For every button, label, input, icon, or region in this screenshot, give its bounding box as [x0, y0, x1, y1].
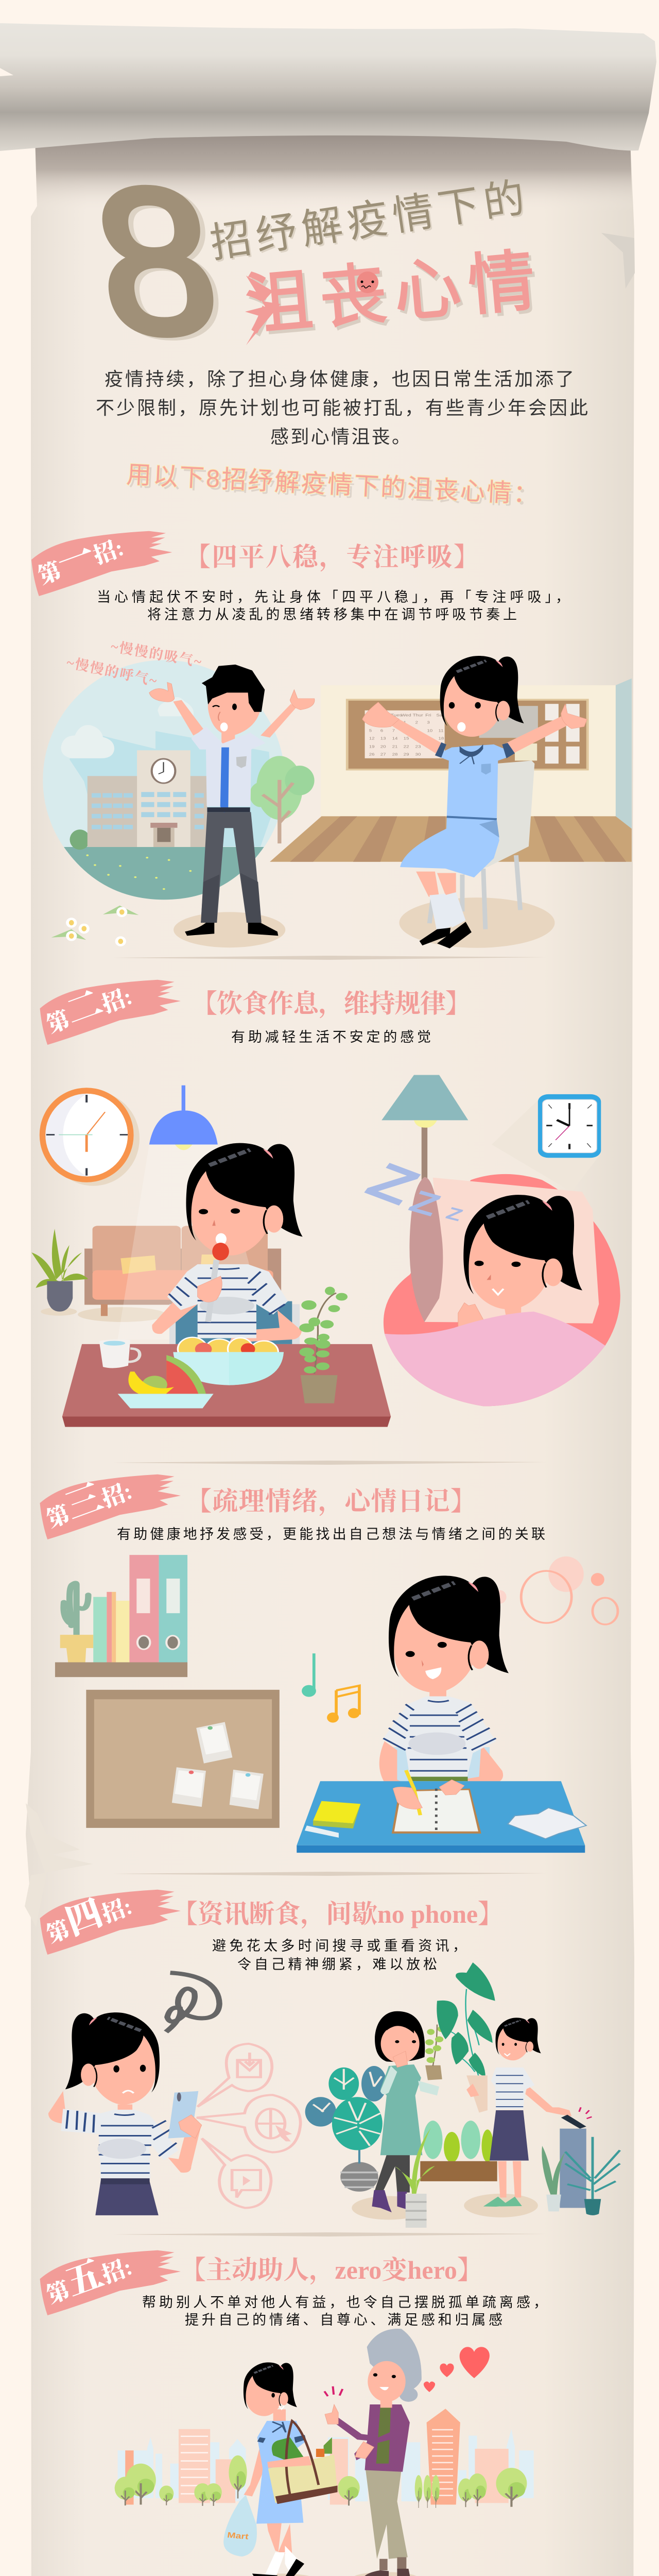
potted plant	[31, 1229, 88, 1316]
girl holding plant	[464, 2018, 571, 2217]
section 4 banner	[40, 1883, 181, 1955]
section 1 heading: 【四平八稳，专注呼吸】	[185, 543, 479, 572]
yellow books	[305, 1801, 366, 1838]
section 2 banner: 第二招:	[40, 973, 136, 1041]
sofa	[78, 1226, 281, 1322]
intro text block: 疫情持续，除了担心身体健康，也因日常生活加添了	[105, 368, 574, 389]
section 1 banner: 第一招:	[31, 524, 128, 592]
tall green plant	[437, 1962, 495, 2113]
section 4 heading: 【资讯断食，间歇no phone】	[172, 1900, 504, 1929]
title line two: 沮丧心情	[241, 226, 539, 348]
pendant lamp	[118, 1086, 269, 1340]
shopping girl	[223, 2362, 337, 2576]
classroom: Tues	[391, 713, 402, 717]
classroom: 15	[404, 736, 409, 740]
intro text block: 不少限制，原先计划也可能被打乱，有些青少年会因此	[96, 397, 588, 418]
section 4 banner: 第四招:	[40, 1883, 136, 1951]
classroom: 3	[427, 720, 430, 724]
section 2 text: 有助减轻生活不安定的感觉	[231, 1029, 431, 1045]
chair	[429, 760, 534, 929]
section 4 text: 令自己精神绷紧，难以放松	[237, 1957, 437, 1972]
shadows	[174, 897, 555, 948]
top scroll roll	[0, 23, 656, 151]
classroom: 28	[392, 752, 398, 756]
shopping girl: Mart	[227, 2530, 249, 2541]
section 1 text: 当心情起伏不安时，先让身体「四平八稳」，再「专注呼吸」，	[97, 589, 569, 605]
girl writing diary	[379, 1575, 509, 1794]
title numeral 8: 8	[83, 146, 230, 377]
phone on column with plants	[542, 2107, 620, 2215]
classroom: 14	[392, 736, 398, 740]
classroom: 23	[415, 744, 421, 749]
section 2 illustration	[31, 1075, 620, 1427]
section 4 illustration	[48, 1962, 620, 2228]
classroom: 27	[380, 752, 386, 756]
dining table	[62, 1344, 391, 1427]
sleep z letters	[355, 1152, 466, 1225]
section 1 text	[97, 589, 569, 622]
icon: sad face	[357, 272, 378, 293]
torn paper fold right top	[601, 233, 635, 289]
classroom: 5	[369, 728, 372, 733]
water cup	[99, 1340, 140, 1368]
fruit tray	[118, 1355, 214, 1408]
section 5 heading: 【主动助人，zero变hero】	[180, 2256, 483, 2285]
open book	[508, 1808, 586, 1839]
classroom: 11	[438, 728, 444, 733]
classroom: 29	[404, 752, 409, 756]
section 3 banner: 第三招:	[40, 1468, 136, 1535]
section 5 text: 帮助别人不单对他人有益，也令自己摆脱孤单疏离感，	[142, 2295, 547, 2310]
intro text block: 感到心情沮丧。	[270, 426, 410, 447]
blue alarm clock	[492, 1094, 601, 1192]
flowers	[51, 906, 138, 946]
section 1 illustration	[43, 656, 632, 948]
classroom: Wed	[401, 713, 411, 717]
sleeping girl in bed	[384, 1174, 620, 1406]
sub heading: 用以下8招纾解疫情下的沮丧心情：	[126, 461, 539, 509]
section 2 banner	[40, 973, 181, 1045]
classroom: 30	[415, 752, 421, 756]
classroom: 22	[404, 744, 409, 749]
plant shop mother	[305, 2011, 445, 2219]
fern planter	[420, 2121, 497, 2181]
noodle bowl	[173, 1337, 284, 1385]
title line two shadow: 沮丧心情	[244, 229, 541, 351]
girl in uniform	[362, 656, 587, 948]
section dividers	[113, 956, 546, 2576]
sub heading shadow: 用以下8招纾解疫情下的沮丧心情：	[128, 464, 541, 511]
title line one shadow: 招纾解疫情下的	[207, 166, 530, 272]
sleep z letters: Z	[403, 1183, 447, 1223]
sleep z letters: Z	[355, 1152, 431, 1216]
wall shelf with binders	[55, 1555, 187, 1677]
notebook	[392, 1770, 481, 1834]
section 1 banner	[31, 524, 172, 596]
section 4 text: 避免花太多时间搜寻或重看资讯，	[212, 1938, 466, 1954]
classroom: 20	[380, 744, 386, 749]
tall foliage pot	[395, 2128, 435, 2228]
classroom: Sat	[436, 713, 444, 717]
classroom	[270, 679, 632, 862]
intro text block	[96, 368, 588, 447]
section 5 text: 提升自己的情绪、自尊心、满足感和归属感	[185, 2312, 502, 2328]
classroom: 18	[438, 736, 444, 740]
hearts	[424, 2347, 490, 2392]
tree	[250, 756, 315, 843]
school scene circle	[43, 660, 285, 900]
section 3 illustration	[55, 1555, 618, 1853]
classroom: 10	[427, 728, 433, 733]
city skyline	[115, 2409, 534, 2508]
girl eating	[152, 1143, 303, 1343]
decorative bubbles	[493, 1556, 618, 1624]
section 5 text	[142, 2295, 547, 2328]
classroom: Thur	[413, 713, 423, 717]
section 3 heading: 【疏理情绪，心情日记】	[186, 1487, 476, 1516]
cork board	[86, 1690, 280, 1828]
worried spiral	[166, 1973, 219, 2032]
classroom: 13	[380, 736, 386, 740]
section 3 text: 有助健康地抒发感受，更能找出自己想法与情绪之间的关联	[117, 1527, 545, 1542]
wall clock	[40, 1088, 140, 1186]
elderly woman	[324, 2329, 422, 2576]
classroom: 6	[380, 728, 384, 733]
title	[83, 146, 541, 379]
section 1 text: 将注意力从凌乱的思绪转移集中在调节呼吸节奏上	[147, 607, 517, 622]
floor lamp	[381, 1075, 468, 1180]
classroom: 2	[415, 720, 418, 724]
blue desk	[297, 1781, 585, 1853]
breath text two: ~慢慢的呼气~	[65, 655, 158, 689]
chair behind girl	[169, 1301, 300, 1344]
sleep z letters: Z	[443, 1204, 466, 1225]
section 3 banner	[40, 1468, 181, 1539]
music notes	[302, 1653, 360, 1723]
classroom: 1	[404, 720, 406, 724]
section 5 banner: 第五招:	[40, 2244, 136, 2311]
classroom: 7	[392, 728, 395, 733]
section 5 illustration	[115, 2329, 534, 2576]
boy in uniform	[149, 665, 315, 936]
classroom: Fri	[425, 713, 431, 717]
classroom: 19	[369, 744, 375, 749]
icon: lightning cracks	[245, 276, 281, 345]
classroom: 12	[369, 736, 375, 740]
classroom: 26	[369, 752, 375, 756]
title line one: 招纾解疫情下的	[206, 164, 528, 270]
title numeral 8 shadow: 8	[88, 149, 235, 379]
torn paper edge left	[25, 1803, 93, 1927]
worried girl with phone	[48, 2012, 202, 2215]
section 5 banner	[40, 2244, 181, 2315]
shadow under the top roll	[35, 135, 632, 211]
section 4 text	[212, 1938, 466, 1972]
classroom: 21	[392, 744, 398, 749]
section 2 heading: 【饮食作息，维持规律】	[192, 989, 471, 1019]
info bubbles	[197, 2044, 301, 2208]
sprout plant	[299, 1287, 348, 1403]
breath text one: ~慢慢的吸气~	[110, 638, 202, 670]
